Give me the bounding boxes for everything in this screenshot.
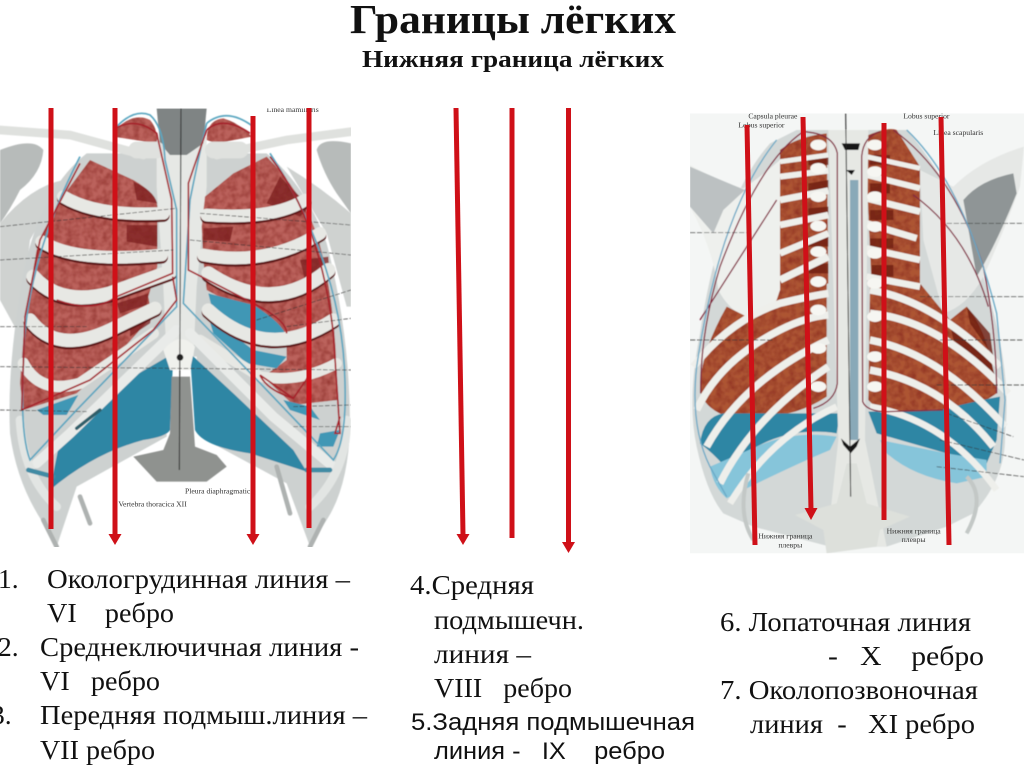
clavicles [0,130,351,155]
small blue recesses [37,395,78,415]
text block: lines 6 and 7: 7. Околопозвоночная [720,674,978,705]
arrow: scapular line right side [747,125,755,545]
blue pleural recess, left front [208,293,285,334]
arrow: posterior axillary line [562,108,575,553]
text block: line 4 [410,569,584,703]
text block: lines 1 to 3: Окологрудинная линия – [47,563,350,594]
left lung [202,157,337,405]
text block: lines 1 to 3: Передняя подмыш.линия – [40,699,367,730]
latin and russian labels [738,111,983,549]
upper lung strips right [780,133,828,300]
arrow: middle line plain [510,108,514,538]
lung dark shading [117,177,330,337]
lower costal margin [20,330,347,547]
arrow: anterior axillary line [246,116,260,545]
lung tissue [20,117,337,410]
text block: line 4: линия – [434,638,531,669]
pleura outlines [22,113,345,460]
latin and russian labels: Capsula pleurae [748,111,798,120]
black center line [179,108,181,470]
dark lung shading [808,155,995,377]
text block: line 4: 4.Средняя [410,569,534,600]
text block: line 4: VIII ребро [434,672,572,703]
back ribs [693,155,1008,540]
text block: lines 1 to 3: VII ребро [40,734,155,765]
scapula left side of person [920,147,1024,313]
ribs [23,197,337,386]
text block: line 5 [411,709,695,765]
arrow: line over left side [306,108,312,528]
upper lung strips left [865,129,920,290]
latin and russian labels: Lobus superior [903,111,950,120]
text block: lines 1 to 3: Среднеключичная линия - [40,631,359,662]
lower lung right [700,280,827,417]
subtitle: Нижняя граница лёгких [362,46,665,73]
latin and russian labels: Linea scapularis [933,128,983,137]
latin labels: Linea mamillaris [267,105,319,114]
blue pleura lower, dark [700,413,840,465]
text block: lines 1 to 3 [0,563,367,765]
latin and russian labels: Нижняя граница [887,526,941,535]
spine column [827,130,887,547]
rib cage back [692,130,1007,547]
panel: posterior chest illustration [690,111,1024,553]
lung outlines [22,123,340,433]
arrow: parasternal line [48,108,54,529]
latin and russian labels: Нижняя граница [758,532,813,541]
center line [846,113,851,497]
latin and russian labels: Lobus superior [738,120,785,129]
blue diaphragm pleura, left [190,353,307,472]
rib shadows [30,199,333,343]
text block: lines 1 to 3: VI ребро [40,665,160,696]
arrow: paravertebral line left side [882,123,886,520]
lung outlines back [700,130,997,412]
text block: line 5: линия - IX ребро [434,738,665,765]
right lung apex [113,117,157,143]
rib cage body [9,153,350,547]
leader lines [690,223,1024,477]
blue diaphragm pleura, right [50,353,173,490]
spine and xiphoid [133,377,227,482]
right lung [20,160,157,410]
vertebra knobs [810,140,883,392]
neck spine shadow [157,108,207,155]
scapula right side of person [701,160,780,316]
latin labels [118,105,319,509]
pleura outline back [695,130,1005,497]
spinal dark details [841,143,860,453]
left lung apex [207,118,252,143]
text block: lines 6 and 7: - X ребро [828,640,984,671]
text block: lines 6 and 7 [720,606,984,739]
latin labels: Vertebra thoracica XII [118,500,187,509]
text block: lines 1 to 3: VI ребро [47,597,174,628]
text block: lines 6 and 7: 6. Лопаточная линия [720,606,971,637]
arrow: midclavicular line [108,108,122,545]
latin labels: Pleura diaphragmatica [185,486,254,495]
latin and russian labels: плевры [902,535,926,544]
lower lung left [868,283,997,412]
lumbar vertebra [795,463,910,553]
arrow: paravertebral line [803,117,818,520]
text block: line 5: 5.Задняя подмышечная [411,709,695,736]
central sternum [157,137,207,360]
arrow: scapular line left side [941,117,949,545]
text block: line 4: подмышечн. [434,604,584,635]
text block: lines 6 and 7: линия - XI ребро [750,708,975,739]
latin and russian labels: плевры [778,540,802,549]
arrow: middle axillary line [456,108,470,545]
blue pleura lower, light [710,435,837,498]
panel: anterior chest illustration [0,105,351,553]
lung tissue [700,129,997,417]
shoulders and arm bones [0,141,351,333]
